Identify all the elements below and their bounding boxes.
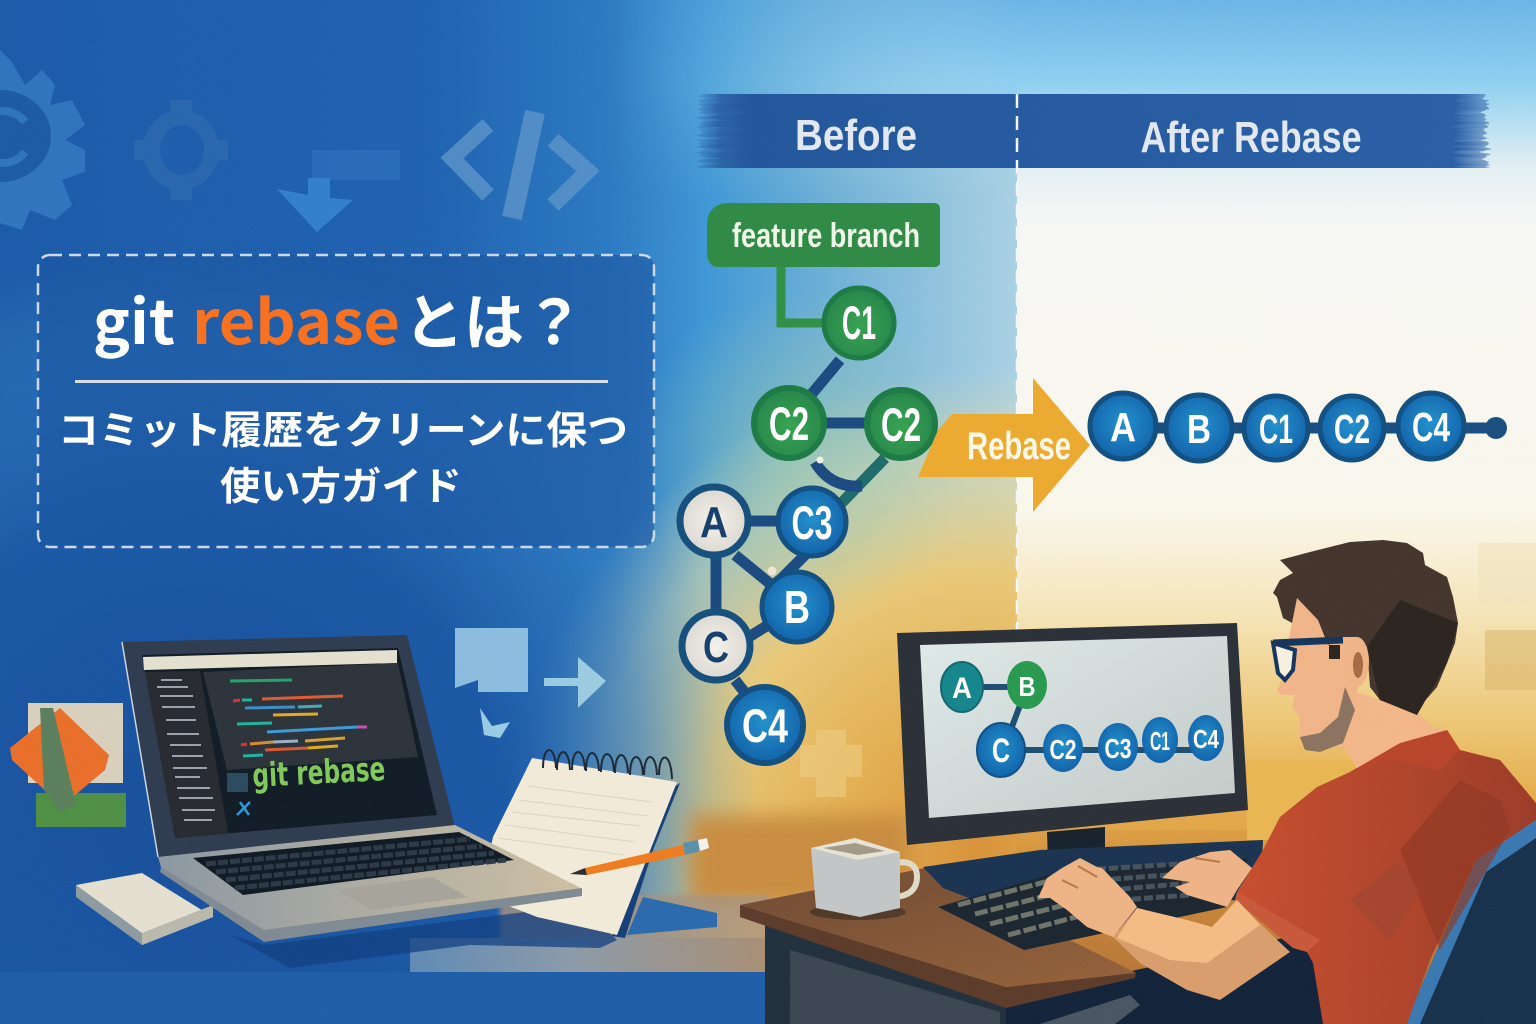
label: After Rebase: After Rebase — [1140, 113, 1362, 162]
node C3 — [1098, 723, 1138, 771]
code lines — [230, 680, 367, 756]
faint plus shape — [800, 730, 862, 797]
neck — [1343, 690, 1447, 768]
hair — [1273, 540, 1458, 715]
commit C2: C2 — [1334, 406, 1370, 452]
right hand — [1162, 850, 1252, 907]
before commit graph — [680, 203, 940, 763]
commit B: B — [784, 581, 810, 633]
commit C2: C2 — [881, 398, 921, 451]
commit C1: C1 — [1259, 406, 1293, 452]
node C — [977, 723, 1025, 777]
main heading: git — [93, 273, 175, 362]
background icon: code brackets — [452, 112, 588, 218]
commit C1: C1 — [842, 296, 876, 349]
tag: feature branch — [707, 203, 940, 267]
monitor — [897, 623, 1248, 885]
commit B — [1166, 395, 1232, 461]
commit A — [680, 487, 748, 555]
node C1 — [1142, 717, 1178, 763]
command text: git rebase: git rebase — [251, 749, 386, 795]
background icon: turn arrow — [277, 150, 400, 232]
title panel — [38, 255, 654, 547]
node C2: C2 — [1050, 734, 1076, 765]
face — [1277, 598, 1365, 750]
header band — [700, 94, 1486, 168]
notepad rings — [543, 750, 672, 779]
arrow: Rebase: Rebase — [967, 425, 1071, 468]
left hand — [1038, 858, 1137, 937]
icon: cursor mark — [237, 802, 250, 815]
sleeve cuff — [1235, 892, 1320, 952]
commit C1 — [824, 288, 894, 358]
commit A — [1090, 393, 1156, 459]
commit B: B — [1187, 406, 1211, 452]
commit C2 — [867, 390, 935, 458]
sidebar lines — [157, 680, 215, 820]
icon: git logo card — [10, 703, 126, 827]
desk — [740, 840, 1405, 1024]
shirt — [1237, 730, 1536, 1024]
commit C2 — [754, 388, 824, 458]
commit C — [682, 612, 750, 680]
commit C3 — [778, 488, 846, 556]
node C1: C1 — [1150, 726, 1170, 756]
node B: B — [1018, 671, 1036, 702]
commit C4 — [727, 687, 803, 763]
commit A: A — [1110, 404, 1136, 450]
commit C4: C4 — [742, 699, 788, 752]
background icon: large gear — [0, 50, 85, 230]
subheading line 1: コミット履歴をクリーンに保つ — [58, 400, 628, 456]
commit C2 — [1320, 396, 1384, 460]
node C3: C3 — [1104, 733, 1132, 764]
book — [76, 873, 213, 945]
keyboard — [938, 858, 1248, 950]
commit C4: C4 — [1412, 404, 1450, 450]
subheading line 2: 使い方ガイド — [220, 456, 462, 512]
node C4 — [1188, 715, 1224, 761]
node A — [941, 662, 983, 712]
node C4: C4 — [1193, 724, 1219, 754]
coffee mug — [810, 838, 917, 920]
chair — [1405, 817, 1536, 1024]
terminal prompt box — [227, 773, 248, 792]
arrow: Rebase — [918, 378, 1090, 512]
notepad — [480, 750, 717, 938]
commit C: C — [703, 623, 729, 672]
laptop — [122, 635, 582, 942]
node B — [1007, 661, 1047, 709]
beard — [1300, 687, 1355, 752]
main heading: とは？ — [404, 273, 584, 362]
tag: feature branch: feature branch — [732, 217, 920, 255]
glasses — [1273, 640, 1343, 680]
commit C3: C3 — [792, 496, 832, 549]
main heading: rebase — [192, 273, 400, 362]
background icons: light arrows — [455, 628, 606, 738]
forearm — [1113, 900, 1290, 1000]
commit C4 — [1398, 393, 1464, 459]
background icon: small gear — [134, 100, 228, 200]
commit C1 — [1244, 396, 1308, 460]
person — [1038, 540, 1536, 1024]
ear — [1345, 637, 1369, 687]
node C: C — [992, 732, 1010, 770]
commit A: A — [700, 498, 728, 547]
pencil — [570, 838, 709, 875]
node A: A — [952, 672, 972, 705]
monitor graph — [941, 661, 1224, 777]
label: Before: Before — [795, 111, 917, 160]
laptop shadow — [230, 905, 617, 968]
divider — [1016, 94, 1018, 630]
commit B — [762, 572, 832, 642]
node C2 — [1043, 724, 1083, 772]
commit C2: C2 — [769, 397, 809, 450]
after commit graph — [1090, 393, 1507, 461]
